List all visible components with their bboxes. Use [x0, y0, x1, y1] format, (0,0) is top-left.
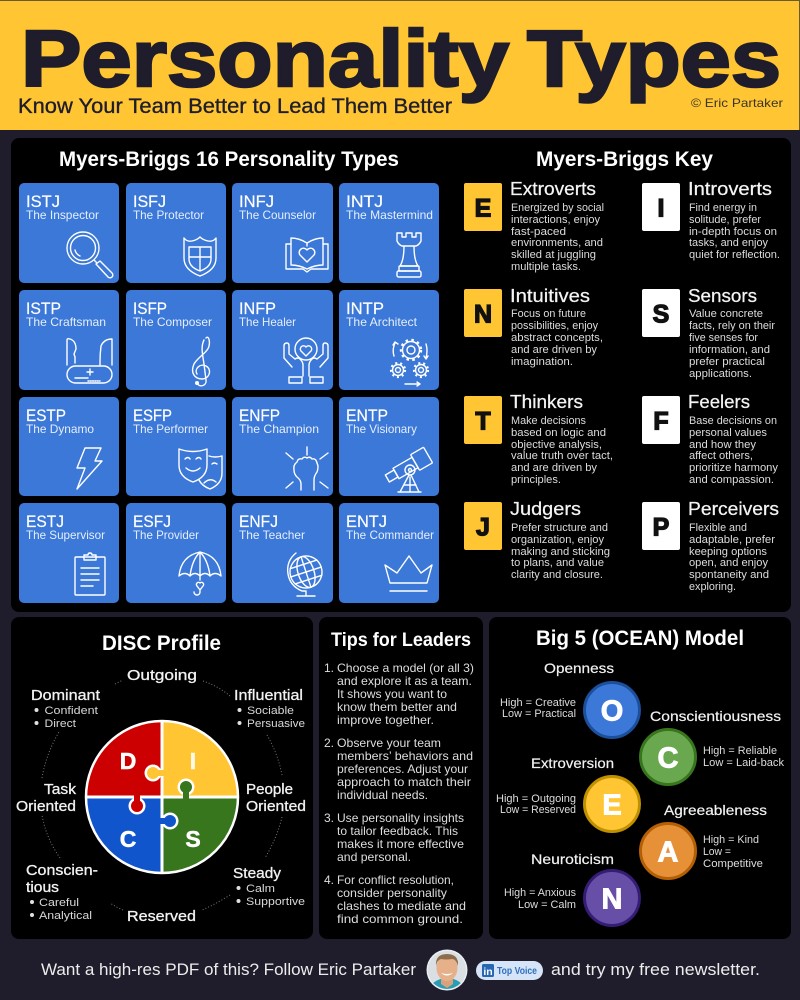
trait: Agreeableness: A: [658, 836, 679, 868]
trait: Openness: [500, 660, 640, 738]
key: Intuitives: Focus on future: [511, 308, 586, 320]
label: People Oriented: [246, 782, 306, 815]
key: Thinkers: principles.: [511, 474, 561, 486]
trait: Extroversion: High = Outgoing: [496, 793, 576, 805]
key: Introverts: [642, 178, 780, 261]
key: Thinkers: Thinkers: [510, 391, 583, 412]
tile: ISTJ: ISTJ: [26, 192, 60, 211]
key: Extroverts: Extroverts: [510, 178, 596, 199]
key: Introverts: I: [658, 194, 664, 222]
tile: INTP: INTP: [346, 299, 384, 318]
label: Task Oriented: Oriented: [16, 799, 76, 815]
key: Introverts: in-depth focus on: [689, 226, 777, 238]
trait: Neuroticism: Neuroticism: [531, 851, 614, 867]
key: Extroverts: multiple tasks.: [511, 261, 581, 273]
key: Thinkers: and are driven by: [511, 462, 598, 474]
tile: ESFJ: The Provider: [133, 528, 199, 542]
key: Feelers: prioritize harmony: [689, 462, 779, 474]
tip 2: individual needs.: [337, 788, 428, 802]
tip 3: makes it more effective: [337, 837, 464, 851]
key: Extroverts: [464, 178, 604, 273]
key: Thinkers: based on logic and: [511, 427, 606, 439]
key: Judgers: J: [476, 514, 490, 542]
key: Thinkers: value truth over tact,: [511, 450, 613, 462]
icon: telescope: [383, 447, 433, 492]
footer call to action: Want a high-res PDF of this? Follow Eric Partaker: [41, 961, 417, 979]
label: Task Oriented: Task: [44, 782, 77, 798]
LinkedIn Top Voice badge: Top Voice: [497, 966, 537, 977]
tip 4: clashes to mediate and: [337, 899, 466, 913]
label: Influential: [234, 688, 305, 730]
icon: globe: [286, 552, 326, 596]
key: Feelers: F: [653, 408, 669, 436]
tile: ENFP: ENFP: [239, 406, 280, 425]
icon: hands holding heart: [284, 338, 328, 383]
key: Thinkers: T: [475, 408, 491, 436]
profile photo: [426, 950, 468, 990]
key: Introverts: Introverts: [688, 178, 772, 199]
tip 4: [324, 873, 466, 926]
LinkedIn Top Voice badge: in: [483, 966, 493, 978]
label: Conscientious: tious: [26, 880, 59, 896]
icon: shield: [184, 237, 216, 276]
key: Judgers: to plans, and value: [511, 557, 604, 569]
tile: INFP: INFP: [239, 299, 276, 318]
key: Perceivers: adaptable, prefer: [689, 534, 775, 546]
tile: ENTJ: The Commander: [346, 528, 434, 542]
key: Judgers: [464, 498, 610, 581]
key: Intuitives: [464, 285, 603, 368]
trait: Neuroticism: High = Anxious: [504, 887, 577, 899]
icon: gears: [391, 340, 428, 386]
tip 2: preferences. Adjust your: [337, 762, 468, 776]
key: Sensors: five senses for: [689, 332, 758, 344]
label: Conscientious: Careful: [39, 897, 79, 909]
heading: DISC Profile: DISC Profile: [102, 632, 221, 655]
key: Extroverts: interactions, enjoy: [511, 214, 600, 226]
trait: Extroversion: Extroversion: [531, 755, 614, 771]
key: Judgers: Judgers: [510, 498, 581, 519]
key: Feelers: and compassion.: [689, 474, 774, 486]
label: Influential: Influential: [234, 688, 303, 704]
trait: Neuroticism: Low = Calm: [518, 899, 576, 911]
tile: ESTP: The Dynamo: [26, 422, 94, 436]
label: People Oriented: Oriented: [246, 799, 306, 815]
tile: ISTP: [19, 290, 119, 390]
key: Perceivers: Flexible and: [689, 522, 747, 534]
tip 1: and explore it as a team.: [337, 674, 472, 688]
tip 4: consider personality: [337, 886, 447, 900]
key: Feelers: personal values: [689, 427, 767, 439]
key: Extroverts: fast-paced: [511, 226, 566, 238]
title: [21, 14, 781, 103]
key: Judgers: making and sticking: [511, 546, 610, 558]
tile: ENTP: The Visionary: [346, 422, 417, 436]
tile: INFJ: [232, 183, 333, 283]
tile: ISFP: ISFP: [133, 299, 167, 318]
key: Intuitives: imagination.: [511, 356, 573, 368]
key: Introverts: quiet for reflection.: [689, 249, 780, 261]
heading: 16 personality types: Myers-Briggs 16 Personality Types: [59, 148, 399, 171]
tip 1: 1.: [324, 661, 334, 675]
key: Judgers: Prefer structure and: [511, 522, 608, 534]
key: Sensors: Sensors: [688, 285, 757, 306]
key: Sensors: facts, rely on their: [689, 320, 775, 332]
key: Thinkers: [464, 391, 613, 486]
key: Sensors: prefer practical: [689, 356, 765, 368]
key: Extroverts: E: [475, 194, 491, 222]
header banner: [0, 0, 800, 130]
icon: raised fist: [286, 447, 328, 490]
tile: INFP: [232, 290, 333, 390]
tile: INTJ: The Mastermind: [346, 208, 433, 222]
footer call to action: [41, 950, 758, 990]
icon: open book with heart: [286, 238, 328, 272]
tile: ENTP: [339, 397, 439, 496]
panel: DISC profile: [11, 617, 313, 939]
tile: ESTJ: [19, 503, 119, 603]
label: Conscientious: [26, 863, 98, 922]
tile: ISFJ: [126, 183, 226, 283]
tile: INTJ: INTJ: [346, 192, 383, 211]
tile: ESFP: ESFP: [133, 406, 172, 425]
trait: Openness: Low = Practical: [502, 708, 576, 720]
icon: lightning bolt: [77, 448, 102, 489]
trait: Conscientiousness: Conscientiousness: [650, 708, 781, 724]
label: Dominant: Dominant: [31, 688, 100, 704]
tile: ENTJ: ENTJ: [346, 512, 387, 531]
label: Reserved: Reserved: [127, 909, 196, 925]
key: Sensors: S: [653, 300, 669, 328]
key: Intuitives: N: [474, 300, 492, 328]
trait: Agreeableness: Agreeableness: [664, 802, 767, 818]
key: Intuitives: possibilities, enjoy: [511, 320, 598, 332]
tile: ISFP: [126, 290, 226, 390]
label: Dominant: Direct: [44, 718, 76, 730]
key: Feelers: Feelers: [688, 391, 750, 412]
trait: Extroversion: [496, 755, 640, 832]
label: Influential: Sociable: [247, 705, 294, 717]
tile: ESFP: The Performer: [133, 422, 208, 436]
tip 2: Observe your team: [337, 736, 441, 750]
puzzle circle: D: [120, 748, 136, 774]
heading: Big 5 (OCEAN) Model: Big 5 (OCEAN) Model: [536, 627, 744, 650]
trait: Openness: O: [601, 696, 623, 728]
trait: Openness: Openness: [544, 660, 614, 676]
icon: treble clef: [193, 337, 209, 386]
key: Sensors: [642, 285, 775, 380]
tip 2: members’ behaviors and: [337, 749, 473, 763]
trait: Conscientiousness: High = Reliable: [703, 745, 777, 757]
trait: Extroversion: E: [602, 790, 622, 822]
tip 1: It shows you want to: [337, 687, 447, 701]
puzzle circle: C: [120, 826, 136, 852]
LinkedIn Top Voice badge: [476, 961, 543, 980]
key: Feelers: and how they: [689, 439, 757, 451]
tile: ISTJ: [19, 183, 119, 283]
tile: ESFP: [126, 397, 226, 496]
key: Judgers: organization, enjoy: [511, 534, 604, 546]
label: Influential: Persuasive: [247, 718, 305, 730]
subtitle: Know Your Team Better to Lead Them Better: [18, 95, 452, 118]
key: Intuitives: abstract concepts,: [511, 332, 603, 344]
tile: ENTP: ENTP: [346, 406, 388, 425]
trait: Conscientiousness: C: [658, 742, 679, 774]
tile: ISTP: The Craftsman: [26, 315, 106, 329]
key: Feelers: [642, 391, 779, 486]
tile: ISFJ: The Protector: [133, 208, 204, 222]
tip 4: 4.: [324, 873, 334, 887]
heading: key: Myers-Briggs Key: [536, 148, 713, 171]
tip 1: [324, 661, 474, 727]
key: Perceivers: Perceivers: [688, 498, 779, 519]
tip 3: Use personality insights: [337, 811, 464, 825]
label: Steady: [233, 866, 305, 908]
tile: ENFJ: [232, 503, 333, 603]
tile: INTJ: [339, 183, 439, 283]
key: Thinkers: Make decisions: [511, 415, 586, 427]
trait: Neuroticism: N: [602, 884, 622, 916]
tile: ISTJ: The Inspector: [26, 208, 99, 222]
icon: umbrella with heart: [179, 552, 221, 595]
icon: crown: [385, 556, 432, 591]
label: Steady: Supportive: [246, 896, 305, 908]
trait: Openness: High = Creative: [500, 697, 576, 709]
label: Task Oriented: [16, 782, 77, 815]
tile: ENFJ: ENFJ: [239, 512, 278, 531]
puzzle circle: I: [190, 748, 196, 774]
tile: ESTJ: ESTJ: [26, 512, 64, 531]
heading: Tips for Leaders: Tips for Leaders: [331, 629, 471, 651]
label: Outgoing: Outgoing: [127, 668, 197, 684]
panel: Tips for Leaders: [319, 617, 483, 939]
key: Feelers: Base decisions on: [689, 415, 777, 427]
key: Intuitives: Intuitives: [510, 285, 590, 306]
label: Conscientious: Analytical: [39, 910, 92, 922]
trait: Conscientiousness: [640, 708, 785, 784]
icon: magnifying glass: [67, 232, 113, 278]
key: Introverts: solitude, prefer: [689, 214, 761, 226]
key: Intuitives: and are driven by: [511, 344, 598, 356]
trait: Agreeableness: High = Kind: [703, 834, 759, 846]
tip 4: For conflict resolution,: [337, 873, 454, 887]
puzzle circle: S: [185, 826, 201, 852]
key: Perceivers: spontaneity and: [689, 569, 769, 581]
trait: Agreeableness: [640, 802, 767, 878]
tile: ESTP: ESTP: [26, 406, 66, 425]
title: Personality: [21, 14, 510, 103]
copyright: © Eric Partaker: [691, 96, 783, 110]
key: Sensors: Value concrete: [689, 308, 763, 320]
dotted connector ring: [42, 680, 282, 910]
tile: ESTP: [19, 397, 119, 496]
key: Judgers: clarity and closure.: [511, 569, 603, 581]
tip 3: and personal.: [337, 850, 411, 864]
key: Introverts: Find energy in: [689, 202, 757, 214]
tile: INFP: The Healer: [239, 315, 296, 329]
tile: INFJ: INFJ: [239, 192, 274, 211]
trait: Agreeableness: Low =: [703, 846, 731, 858]
key: Extroverts: environments, and: [511, 237, 603, 249]
tip 1: Choose a model (or all 3): [337, 661, 474, 675]
trait: Extroversion: Low = Reserved: [500, 804, 576, 816]
tip 3: 3.: [324, 811, 334, 825]
tile: ENFJ: The Teacher: [239, 528, 305, 542]
key: Perceivers: [642, 498, 779, 593]
icon: pocket knife: [67, 339, 112, 383]
tip 2: [324, 736, 473, 802]
trait: Conscientiousness: Low = Laid-back: [703, 757, 785, 769]
tip 1: know them better and: [337, 700, 457, 714]
newsletter text: and try my free newsletter.: [551, 961, 760, 979]
label: People Oriented: People: [246, 782, 293, 798]
key: Thinkers: objective analysis,: [511, 439, 602, 451]
tile: ISFJ: ISFJ: [133, 192, 166, 211]
tip 1: improve together.: [337, 713, 434, 727]
key: Perceivers: exploring.: [689, 581, 736, 593]
tile: ENFP: [232, 397, 333, 496]
icon: theater masks: [179, 449, 222, 489]
key: Extroverts: Energized by social: [511, 202, 604, 214]
puzzle circle: [86, 721, 238, 873]
key: Sensors: information, and: [689, 344, 770, 356]
tip 2: 2.: [324, 736, 334, 750]
key: Sensors: applications.: [689, 368, 752, 380]
trait: Agreeableness: Competitive: [703, 858, 763, 870]
label: Steady: Calm: [246, 883, 275, 895]
tile: ESTJ: The Supervisor: [26, 528, 105, 542]
key: Extroverts: skilled at juggling: [511, 249, 596, 261]
tile: ESFJ: ESFJ: [133, 512, 171, 531]
label: Dominant: [31, 688, 100, 730]
panel: Myers-Briggs: [11, 138, 791, 612]
tile: ISFP: The Composer: [133, 315, 212, 329]
title: Types: [527, 14, 781, 103]
label: Steady: Steady: [233, 866, 282, 882]
label: Conscientious: Conscien-: [26, 863, 98, 879]
icon: clipboard: [75, 553, 105, 595]
tile: ENFP: The Champion: [239, 422, 319, 436]
key: Perceivers: keeping options: [689, 546, 768, 558]
icon: chess rook: [397, 233, 421, 277]
key: Feelers: affect others,: [689, 450, 753, 462]
tip 3: to tailor feedback. This: [337, 824, 458, 838]
panel: Big 5 OCEAN model: [489, 617, 791, 939]
tip 2: approach to match their: [337, 775, 471, 789]
key: Perceivers: open, and enjoy: [689, 557, 768, 569]
tile: ISTP: ISTP: [26, 299, 61, 318]
tile: ENTJ: [339, 503, 439, 603]
tile: ESFJ: [126, 503, 226, 603]
label: Dominant: Confident: [44, 705, 98, 717]
tile: INTP: [339, 290, 439, 390]
tile: INFJ: The Counselor: [239, 208, 316, 222]
tile: INTP: The Architect: [346, 315, 418, 329]
key: Introverts: tasks, and enjoy: [689, 237, 768, 249]
tip 3: [324, 811, 464, 864]
key: Perceivers: P: [653, 514, 669, 542]
tip 4: find common ground.: [337, 912, 463, 926]
trait: Neuroticism: [504, 851, 640, 926]
